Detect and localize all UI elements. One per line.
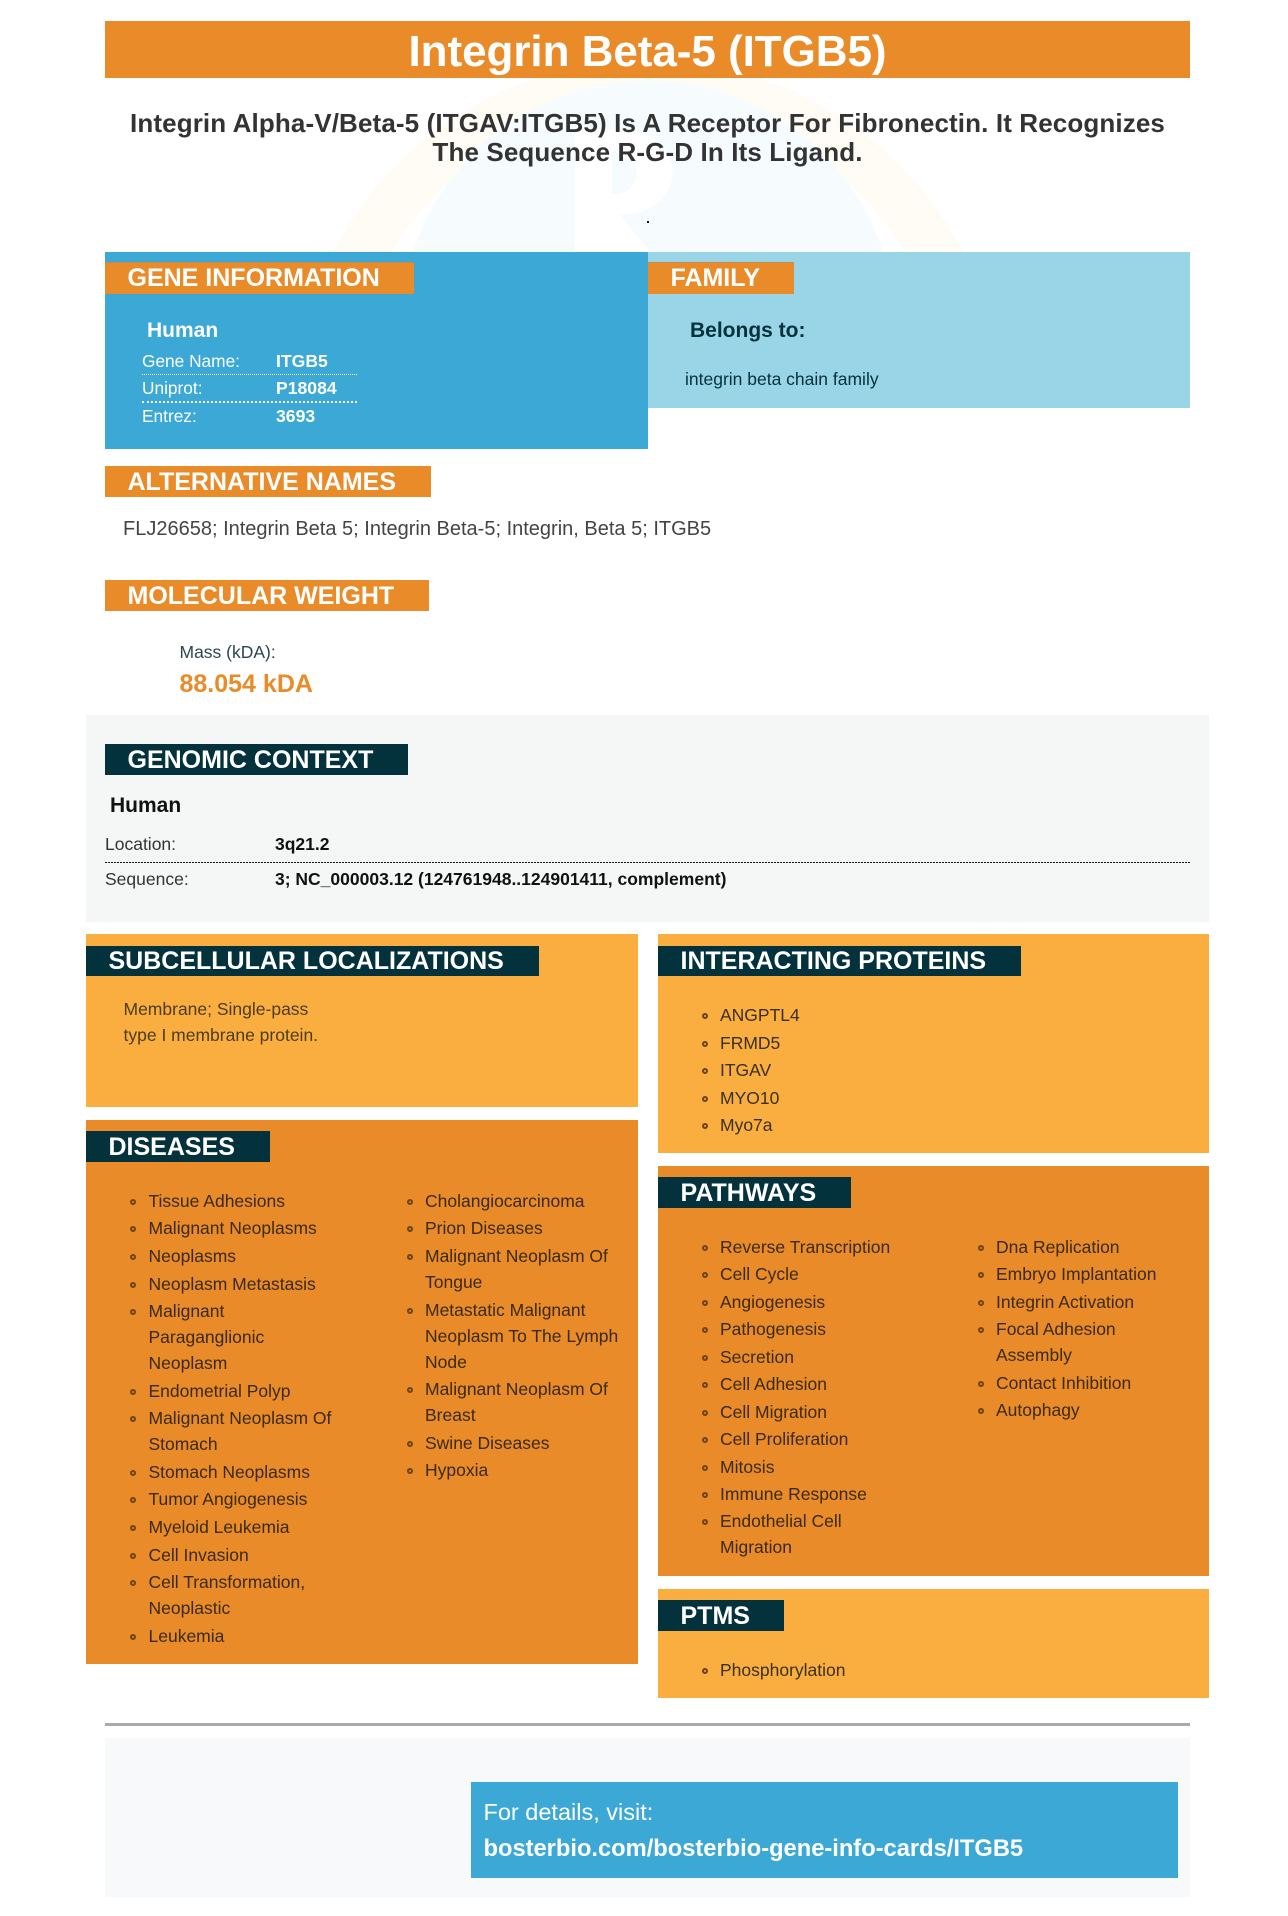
disease list column 1: Paraganglionic xyxy=(148,1327,264,1347)
disease list column 2: Cholangiocarcinoma xyxy=(425,1191,585,1211)
pathway list column 1: Cell Proliferation xyxy=(720,1429,848,1449)
pathway list column 2: Assembly xyxy=(996,1345,1072,1365)
entrez row: 3693 xyxy=(276,406,315,426)
pathway list column 1: Cell Migration xyxy=(720,1402,827,1422)
callout label: For details, visit: xyxy=(484,1799,653,1825)
disease list column 2: Malignant Neoplasm Of xyxy=(425,1246,608,1266)
disease list column 1: Stomach xyxy=(148,1434,218,1454)
footer divider xyxy=(105,1723,1190,1726)
heading: family: FAMILY xyxy=(670,264,760,292)
panel: gene information xyxy=(105,252,648,449)
panel: pathways xyxy=(658,1166,1209,1576)
sequence row: 3; NC_000003.12 (124761948..124901411, complement) xyxy=(275,869,726,889)
panel: interacting proteins xyxy=(658,934,1209,1153)
pathway list column 2 xyxy=(978,1237,1156,1420)
mass value: 88.054 kDA xyxy=(180,670,313,698)
heading: interacting proteins: INTERACTING PROTEINS xyxy=(680,947,986,975)
panel: ptms xyxy=(658,1589,1209,1698)
disease list column 1: Leukemia xyxy=(148,1626,224,1646)
disease list column 2: Prion Diseases xyxy=(425,1218,543,1238)
disease list column 1: Stomach Neoplasms xyxy=(148,1462,310,1482)
disease list column 1: Tumor Angiogenesis xyxy=(148,1489,307,1509)
disease list column 2: Metastatic Malignant xyxy=(425,1300,586,1320)
pathway list column 2: Integrin Activation xyxy=(996,1292,1134,1312)
pathway list column 2: Contact Inhibition xyxy=(996,1373,1131,1393)
disease list column 1: Malignant xyxy=(148,1301,224,1321)
callout url: bosterbio.com/bosterbio-gene-info-cards/ITGB5 xyxy=(484,1836,1023,1862)
panel: diseases xyxy=(86,1120,638,1664)
disease list column 1: Endometrial Polyp xyxy=(148,1381,291,1401)
pathway list column 1: Cell Adhesion xyxy=(720,1374,827,1394)
callout: details link xyxy=(471,1782,1178,1878)
disease list column 1 xyxy=(130,1191,332,1646)
disease list column 2: Neoplasm To The Lymph xyxy=(425,1326,618,1346)
heading: alternative names: ALTERNATIVE NAMES xyxy=(128,468,396,496)
molecular weight value xyxy=(180,642,313,698)
title banner xyxy=(105,21,1190,78)
panel: family xyxy=(648,252,1190,408)
protein list: Myo7a xyxy=(720,1115,773,1135)
disease list column 1: Tissue Adhesions xyxy=(148,1191,285,1211)
protein list: FRMD5 xyxy=(720,1033,780,1053)
heading: ptms xyxy=(658,1600,784,1631)
heading: pathways: PATHWAYS xyxy=(680,1179,816,1207)
family text: integrin beta chain family xyxy=(685,369,879,389)
pathway list column 2: Dna Replication xyxy=(996,1237,1120,1257)
title banner: Integrin Beta-5 (ITGB5) xyxy=(408,27,886,76)
gene name row: ITGB5 xyxy=(276,351,328,371)
localization text xyxy=(124,999,318,1045)
disease list column 1: Malignant Neoplasms xyxy=(148,1218,317,1238)
disease list column 1: Neoplasms xyxy=(148,1246,236,1266)
uniprot row xyxy=(142,375,357,403)
pathway list column 1: Reverse Transcription xyxy=(720,1237,890,1257)
disease list column 1: Myeloid Leukemia xyxy=(148,1517,290,1537)
disease list column 2: Node xyxy=(425,1352,467,1372)
pathway list column 1: Pathogenesis xyxy=(720,1319,826,1339)
localization text: Membrane; Single-pass xyxy=(124,999,308,1019)
ptm list: Phosphorylation xyxy=(720,1660,846,1680)
localization text: type I membrane protein. xyxy=(124,1025,318,1045)
species label: Human xyxy=(110,794,181,817)
disease list column 1: Cell Transformation, xyxy=(148,1572,305,1592)
heading: gene information: GENE INFORMATION xyxy=(128,264,380,292)
heading: ptms: PTMS xyxy=(680,1602,750,1630)
species label: Human xyxy=(147,319,218,342)
disease list column 2: Hypoxia xyxy=(425,1460,488,1480)
pathway list column 1: Angiogenesis xyxy=(720,1292,825,1312)
uniprot row: P18084 xyxy=(276,378,337,398)
subtitle xyxy=(130,108,1165,167)
protein list: ITGAV xyxy=(720,1060,771,1080)
heading: molecular weight: MOLECULAR WEIGHT xyxy=(128,582,394,610)
pathway list column 1 xyxy=(702,1237,890,1557)
protein list xyxy=(702,1005,800,1135)
belongs to label: Belongs to: xyxy=(690,319,806,342)
pathway list column 1: Secretion xyxy=(720,1347,794,1367)
pathway list column 2: Autophagy xyxy=(996,1400,1080,1420)
gene name row xyxy=(142,349,357,375)
pathway list column 1: Mitosis xyxy=(720,1456,774,1476)
entrez row xyxy=(142,406,315,426)
panel: footer xyxy=(105,1738,1190,1897)
pathway list column 1: Endothelial Cell xyxy=(720,1511,842,1531)
pathway list column 2: Embryo Implantation xyxy=(996,1264,1156,1284)
subtitle: The Sequence R-G-D In Its Ligand. xyxy=(432,137,863,167)
pathway list column 1: Migration xyxy=(720,1537,792,1557)
location row xyxy=(105,832,1190,863)
heading: diseases: DISEASES xyxy=(108,1133,235,1161)
pathway list column 1: Cell Cycle xyxy=(720,1264,799,1284)
heading: pathways xyxy=(658,1177,851,1208)
disease list column 1: Malignant Neoplasm Of xyxy=(148,1408,331,1428)
heading: subcellular localizations: SUBCELLULAR LOCALIZATIONS xyxy=(108,947,504,975)
disease list column 2: Malignant Neoplasm Of xyxy=(425,1379,608,1399)
disease list column 1: Neoplasm Metastasis xyxy=(148,1274,316,1294)
pathway list column 1: Immune Response xyxy=(720,1484,867,1504)
disease list column 2: Tongue xyxy=(425,1272,482,1292)
heading: family xyxy=(648,262,794,294)
disease list column 1: Neoplastic xyxy=(148,1598,230,1618)
disease list column 1: Neoplasm xyxy=(148,1353,227,1373)
mass label: Mass (kDA): xyxy=(180,642,276,662)
subtitle: Integrin Alpha-V/Beta-5 (ITGAV:ITGB5) Is A Receptor For Fibronectin. It Recognizes xyxy=(130,108,1165,138)
disease list column 2 xyxy=(407,1191,618,1480)
panel: genomic context xyxy=(86,715,1209,922)
watermark logo xyxy=(334,78,962,252)
heading: diseases xyxy=(86,1131,270,1162)
small dot xyxy=(647,221,649,223)
protein list: ANGPTL4 xyxy=(720,1005,800,1025)
sequence row: Sequence: xyxy=(105,869,189,889)
pathway list column 2: Focal Adhesion xyxy=(996,1319,1116,1339)
panel: subcellular localizations xyxy=(86,934,638,1107)
disease list column 1: Cell Invasion xyxy=(148,1545,249,1565)
disease list column 2: Breast xyxy=(425,1405,476,1425)
gene name row: Gene Name: xyxy=(142,351,240,371)
heading: genomic context: GENOMIC CONTEXT xyxy=(128,746,373,774)
entrez row: Entrez: xyxy=(142,406,197,426)
protein list: MYO10 xyxy=(720,1088,779,1108)
location row: 3q21.2 xyxy=(275,834,329,854)
disease list column 2: Swine Diseases xyxy=(425,1433,550,1453)
alternative names text: FLJ26658; Integrin Beta 5; Integrin Beta-5; Integrin, Beta 5; ITGB5 xyxy=(123,518,711,540)
uniprot row: Uniprot: xyxy=(142,378,203,398)
location row: Location: xyxy=(105,834,176,854)
